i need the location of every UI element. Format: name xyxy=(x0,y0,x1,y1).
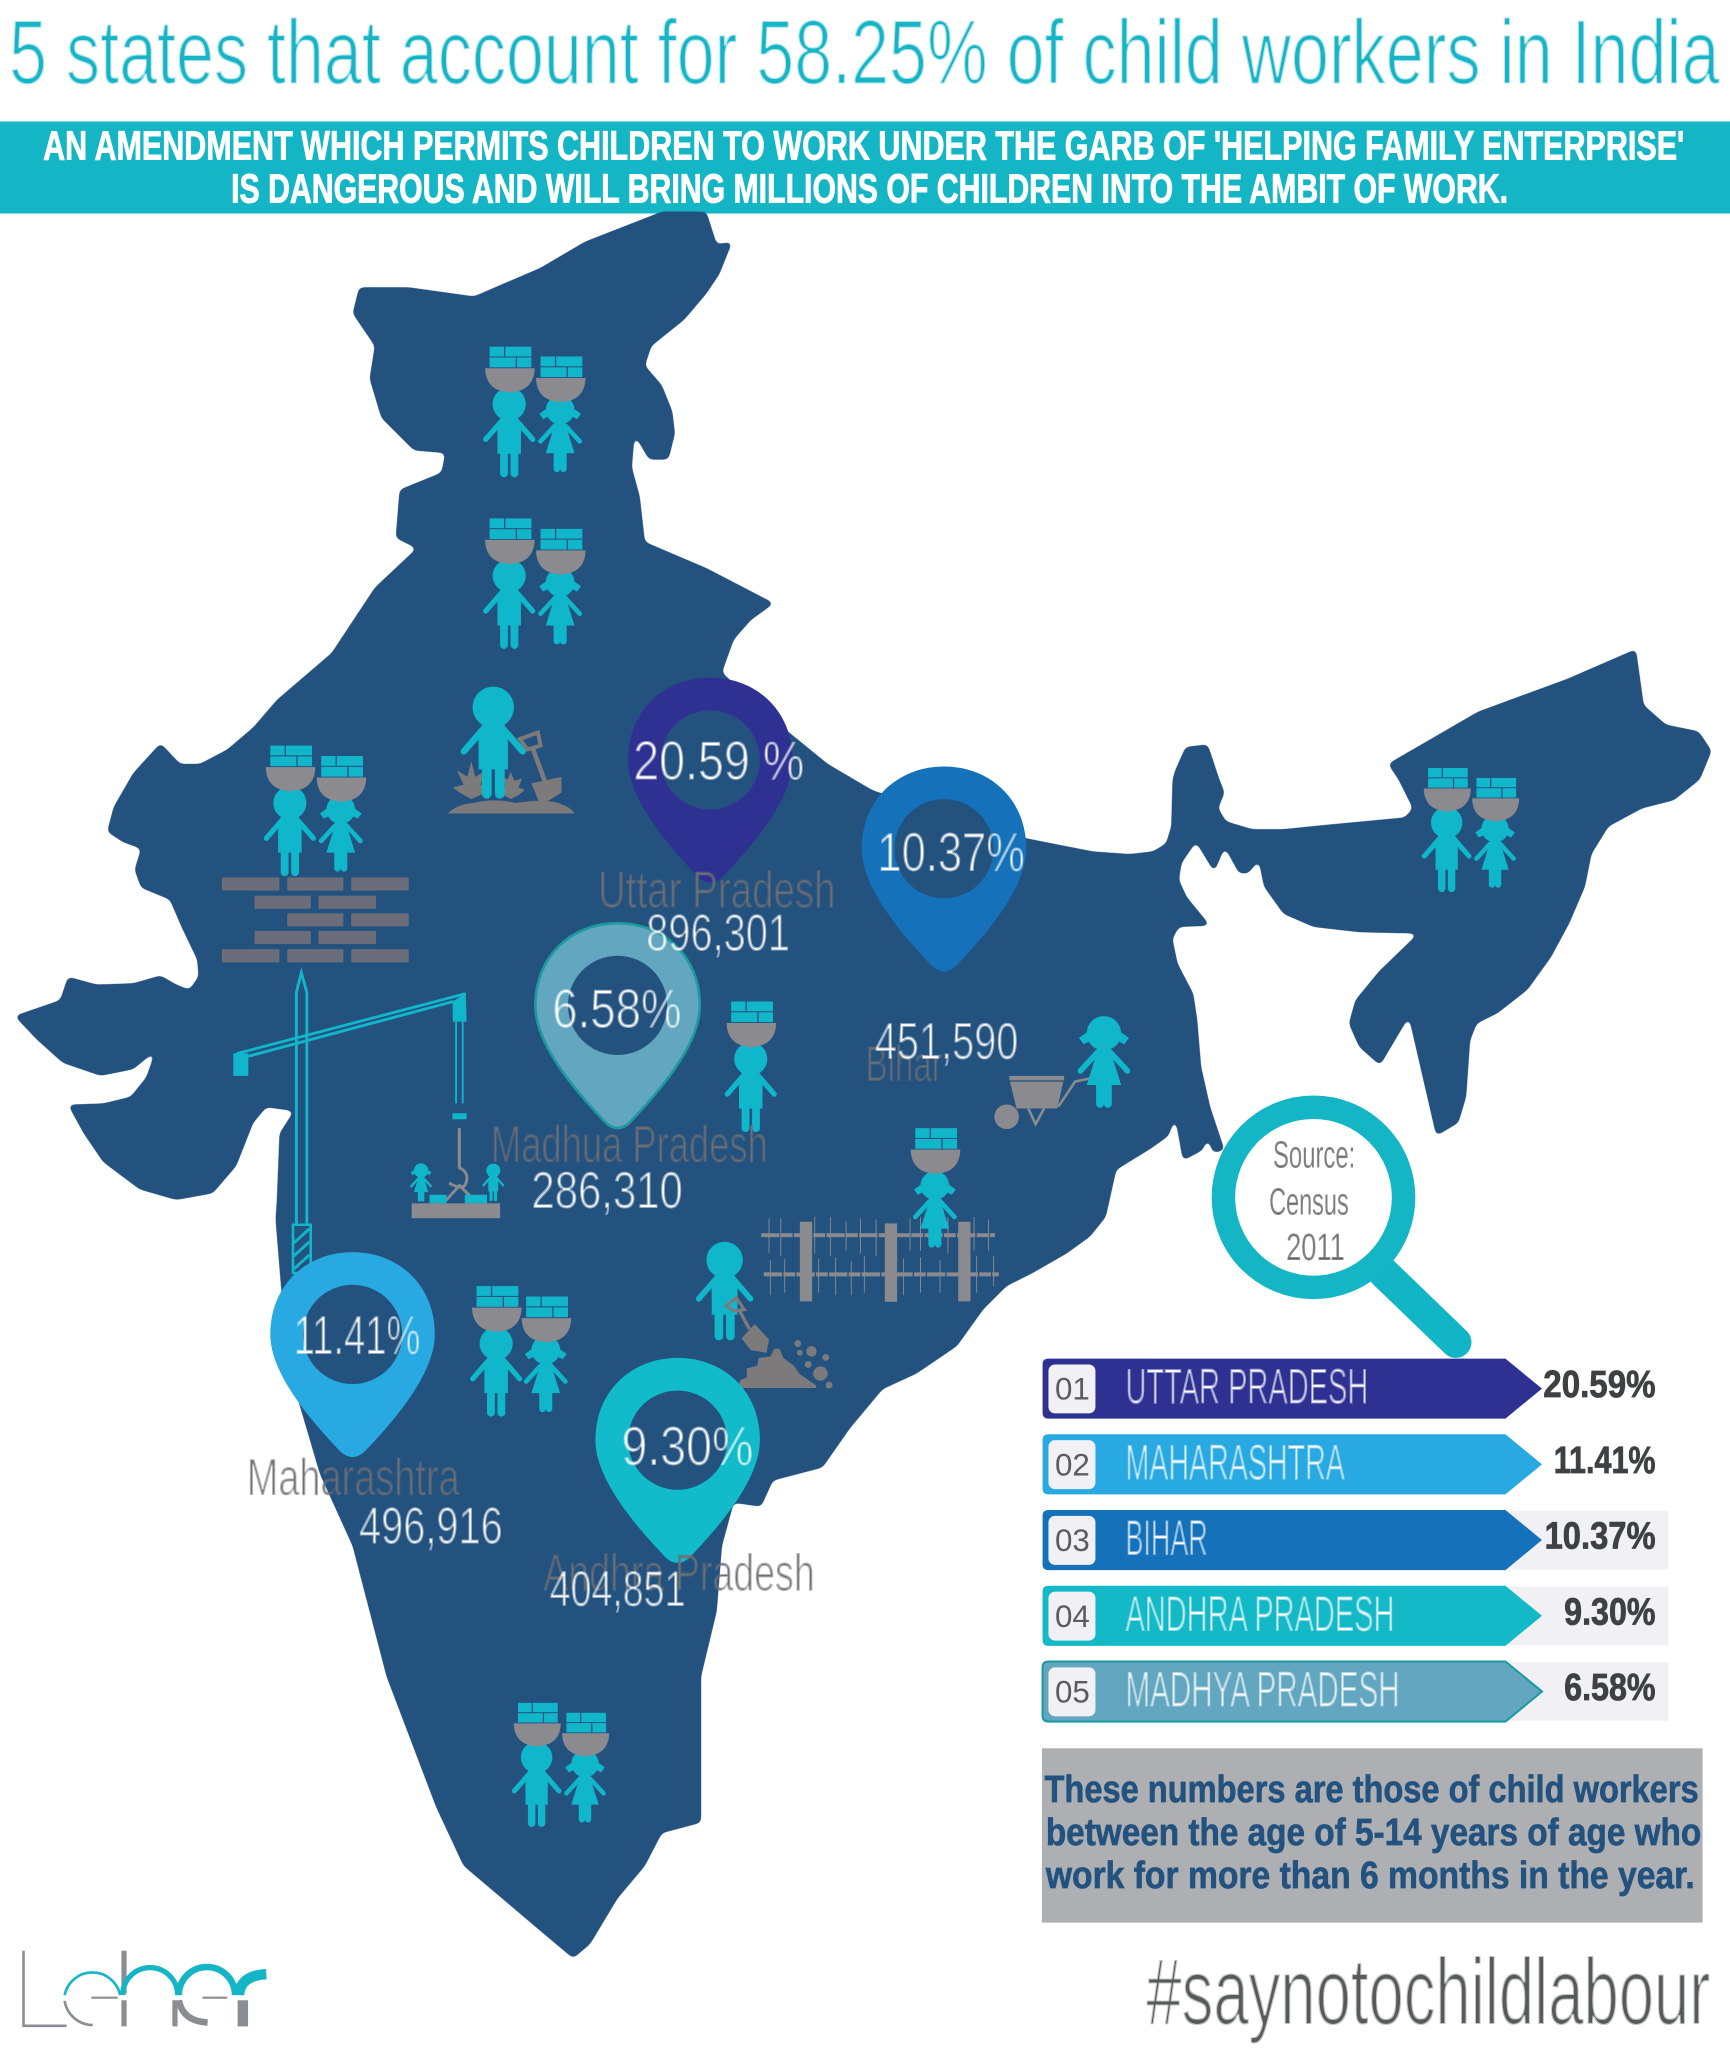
ranking row 3: Bihar: 03 xyxy=(1055,1523,1090,1558)
ranking row 4: Andhra Pradesh: 9.30% xyxy=(1564,1591,1656,1633)
pin: Maharashtra xyxy=(270,1252,435,1457)
label: Andhra Pradesh: Andhra Pradesh xyxy=(543,1544,815,1602)
children pair: south xyxy=(514,1703,609,1827)
pin: Bihar xyxy=(862,766,1026,971)
ranking row 4: Andhra Pradesh xyxy=(1043,1586,1669,1646)
note box xyxy=(1042,1748,1703,1923)
label: Uttar Pradesh: 896,301 xyxy=(646,905,790,963)
label: Andhra Pradesh xyxy=(543,1544,815,1617)
pin: Maharashtra: 11.41% xyxy=(294,1304,420,1366)
label: Maharashtra xyxy=(247,1449,503,1555)
icon: child with shovel and dirt pile xyxy=(699,1242,832,1388)
icon: brick wall xyxy=(222,877,409,962)
ranking row 3: Bihar: BIHAR xyxy=(1125,1510,1208,1566)
label: Bihar: Bihar xyxy=(866,1036,943,1092)
label: Madhya Pradesh xyxy=(491,1116,768,1220)
ranking row 3: Bihar xyxy=(1043,1510,1669,1570)
label: Madhya Pradesh: 286,310 xyxy=(531,1162,683,1220)
ranking row 3: Bihar: 10.37% xyxy=(1545,1516,1656,1558)
label: Madhya Pradesh: Madhua Pradesh xyxy=(491,1116,768,1174)
child with bricks: centre xyxy=(727,1001,776,1132)
logo: Leher xyxy=(24,1951,266,2026)
children pair: Maharashtra xyxy=(472,1286,571,1417)
label: Maharashtra: Maharashtra xyxy=(247,1449,460,1507)
pin: Uttar Pradesh xyxy=(628,678,804,883)
children pair: west on brick wall xyxy=(266,746,366,876)
ranking row 2: Maharashtra xyxy=(1043,1434,1656,1494)
children pair: north 1 xyxy=(485,347,586,477)
label: Uttar Pradesh: Uttar Pradesh xyxy=(598,861,836,919)
icon: construction crane xyxy=(233,973,503,1273)
ranking row 2: Maharashtra: 02 xyxy=(1055,1447,1090,1482)
pin: Andhra Pradesh: 9.30% xyxy=(621,1415,753,1477)
ranking row 2: Maharashtra: 11.41% xyxy=(1554,1440,1656,1482)
magnifier: source note xyxy=(1223,1107,1456,1342)
icon: barbed wire fence xyxy=(761,1217,999,1302)
ranking row 1: Uttar Pradesh: 20.59% xyxy=(1543,1364,1656,1406)
magnifier: source note: Census xyxy=(1269,1181,1349,1223)
ranking row 2: Maharashtra: MAHARASHTRA xyxy=(1125,1434,1345,1490)
children pair: north-east xyxy=(1424,768,1519,892)
ranking row 5: Madhya Pradesh xyxy=(1043,1661,1669,1722)
label: Bihar xyxy=(866,1013,1018,1092)
ranking row 4: Andhra Pradesh: ANDHRA PRADESH xyxy=(1125,1586,1394,1642)
ranking row 5: Madhya Pradesh: 6.58% xyxy=(1564,1667,1656,1709)
pin: Madhya Pradesh: 6.58% xyxy=(552,978,682,1040)
magnifier: source note: Source: xyxy=(1273,1134,1355,1176)
label: Bihar: 451,590 xyxy=(875,1013,1018,1071)
pin: Bihar: 10.37% xyxy=(877,821,1025,883)
ranking row 1: Uttar Pradesh xyxy=(1043,1359,1656,1419)
icon: child with wheelbarrow xyxy=(994,1016,1129,1129)
ranking row 4: Andhra Pradesh: 04 xyxy=(1055,1599,1090,1634)
ranking row 5: Madhya Pradesh: MADHYA PRADESH xyxy=(1125,1662,1400,1718)
pin: Madhya Pradesh xyxy=(535,923,700,1128)
girl with bricks on fence xyxy=(911,1128,960,1248)
header banner xyxy=(0,121,1730,214)
ranking row 1: Uttar Pradesh: UTTAR PRADESH xyxy=(1125,1359,1368,1415)
label: Andhra Pradesh: 404,851 xyxy=(550,1561,685,1617)
pin: Andhra Pradesh xyxy=(595,1358,760,1563)
ranking row 1: Uttar Pradesh: 01 xyxy=(1055,1372,1090,1407)
children pair: north 2 xyxy=(485,518,586,649)
pin: Uttar Pradesh: 20.59 % xyxy=(633,730,804,792)
label: Uttar Pradesh xyxy=(598,861,836,963)
icon: child with spade and plants xyxy=(448,687,574,813)
magnifier: source note: 2011 xyxy=(1286,1227,1345,1269)
ranking row 5: Madhya Pradesh: 05 xyxy=(1055,1675,1090,1710)
label: Maharashtra: 496,916 xyxy=(359,1497,503,1555)
